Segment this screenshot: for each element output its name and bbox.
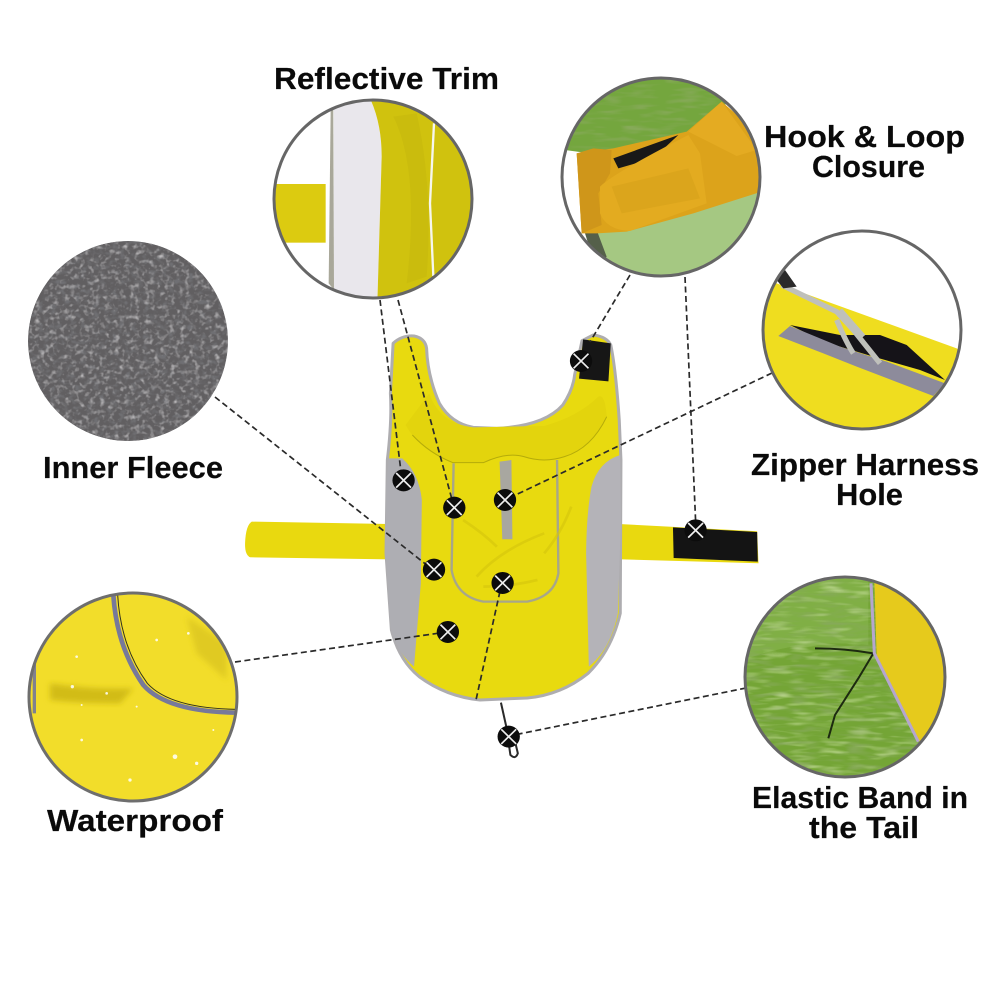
black neck closure <box>579 339 611 381</box>
label: Elastic Band in the Tail: Elastic Band in <box>752 780 968 815</box>
right grey side panel <box>586 455 621 667</box>
edge grey <box>33 663 36 713</box>
infographic: dog raincoat features <box>28 66 978 838</box>
olive yellow panel <box>371 102 470 296</box>
panel: reflective trim photo <box>270 97 480 303</box>
marker: zipper hole <box>494 489 516 511</box>
yellow fabric <box>764 283 958 428</box>
panel: coat illustration <box>245 335 758 757</box>
label: Hook & Loop Closure <box>764 119 965 184</box>
label: Hook & Loop Closure: Hook & Loop <box>764 119 965 154</box>
marker: waterproof <box>437 621 459 643</box>
lavender trim <box>871 583 918 742</box>
label: Zipper Harness Hole: Zipper Harness <box>751 447 979 482</box>
collar flap shading <box>406 393 607 463</box>
marker: pocket <box>491 572 514 594</box>
fabric shading <box>50 683 133 703</box>
label: Zipper Harness Hole: Hole <box>836 477 903 512</box>
collar flap edge <box>412 417 607 463</box>
left strap <box>245 522 387 559</box>
label: Inner Fleece: Inner Fleece <box>43 450 223 485</box>
label: Elastic Band in the Tail: the Tail <box>809 810 919 845</box>
zip slot <box>500 460 512 539</box>
panel: inner fleece photo <box>26 239 230 443</box>
panel: zipper harness photo <box>757 227 967 437</box>
fur seams <box>815 648 873 738</box>
marker: tail elastic <box>498 726 520 748</box>
dark fur <box>567 80 726 152</box>
tail elastic cord <box>501 703 518 757</box>
mustard strap <box>600 146 666 231</box>
label: Elastic Band in the Tail <box>752 780 968 845</box>
wrinkle <box>463 507 571 587</box>
dark collar fragment <box>585 233 607 258</box>
panel: tail elastic photo <box>742 572 955 782</box>
belly strap <box>273 184 326 243</box>
coat body <box>386 335 621 700</box>
marker: neck closure <box>570 350 592 372</box>
flap <box>718 102 722 106</box>
light fur <box>598 193 758 274</box>
reflective trim curve <box>113 595 237 713</box>
left grey side panel <box>386 458 422 667</box>
label: Hook & Loop Closure: Closure <box>812 149 925 184</box>
marker: belly strap <box>684 519 707 541</box>
label: Zipper Harness Hole <box>751 447 979 512</box>
pocket reflective trim <box>452 460 558 602</box>
panel: hook and loop photo <box>557 70 767 283</box>
marker: reflective left <box>392 469 415 491</box>
panel: waterproof photo <box>23 587 243 807</box>
dashed leader lines <box>215 275 772 736</box>
grey panel <box>334 98 382 303</box>
water droplets <box>71 632 214 782</box>
feature markers <box>392 350 707 748</box>
grey pocket lining <box>778 326 945 396</box>
label: Waterproof: Waterproof <box>47 803 224 838</box>
label: Reflective Trim: Reflective Trim <box>274 61 499 96</box>
black strip <box>613 135 678 168</box>
metal leash clip <box>782 285 880 363</box>
pocket opening <box>790 325 945 380</box>
marker: fleece <box>423 559 445 581</box>
right strap with black closure <box>619 524 758 563</box>
white trim <box>430 123 434 276</box>
mustard coat <box>577 102 767 233</box>
marker: reflective right <box>443 497 465 519</box>
yellow coat piece <box>874 583 944 742</box>
